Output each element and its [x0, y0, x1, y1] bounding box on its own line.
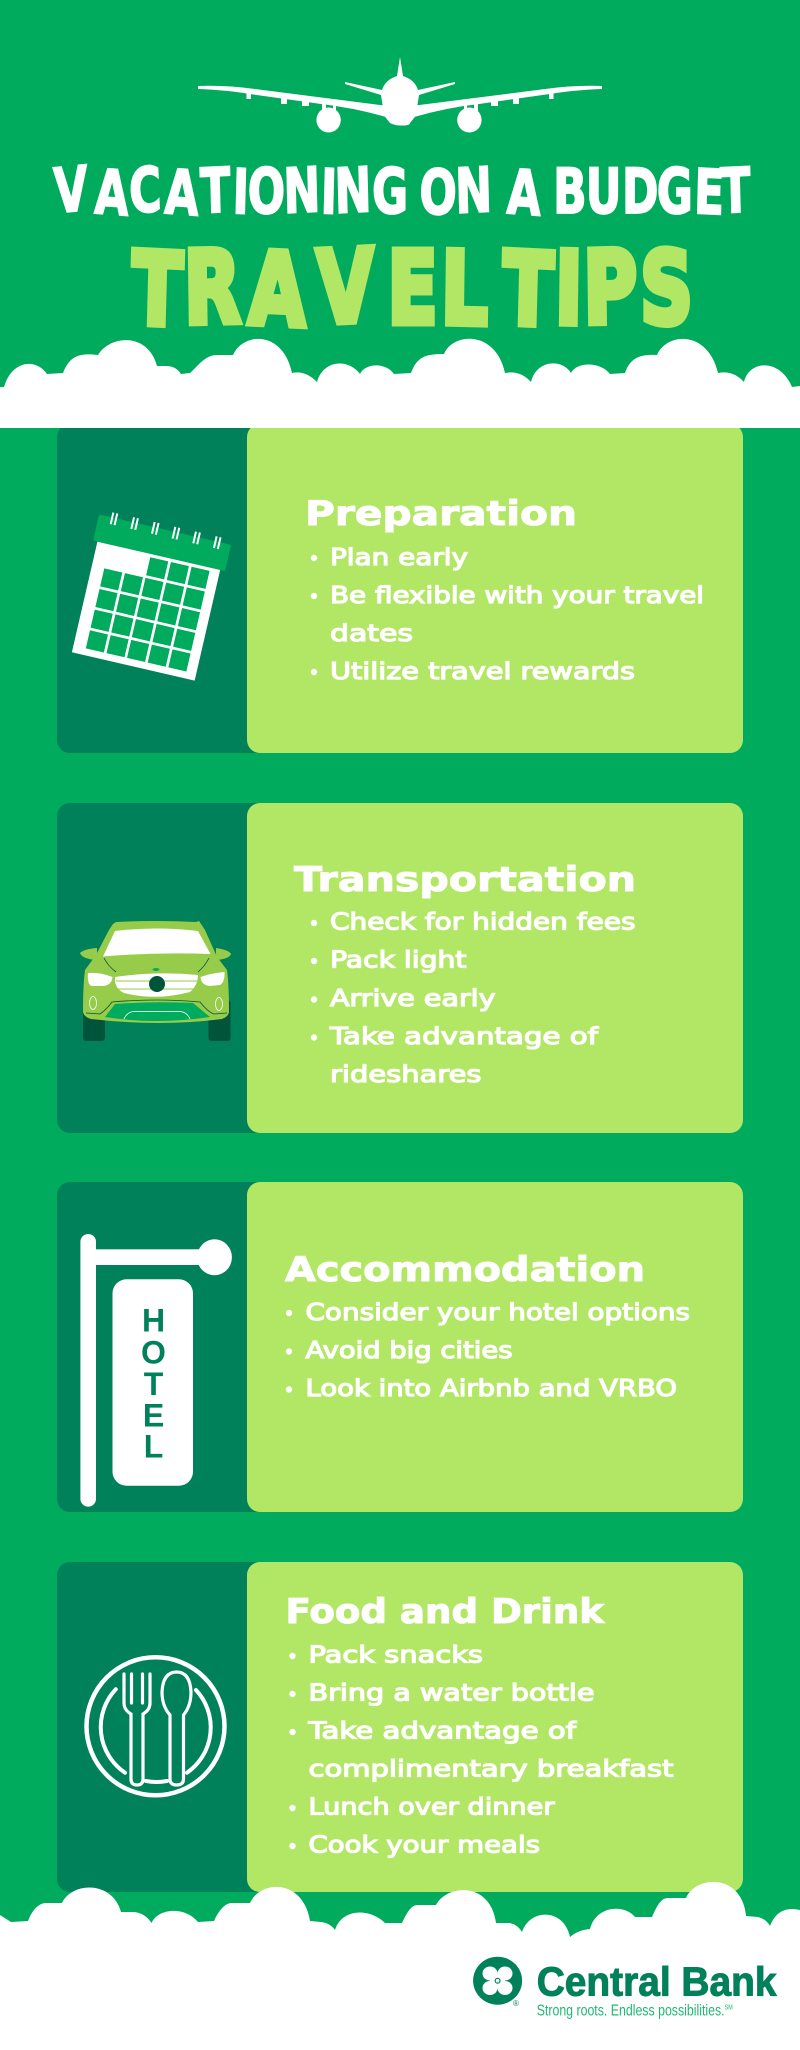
- list: accommodation tips: Look into Airbnb and VRBO: [306, 1376, 677, 1402]
- icon: hotel sign: O: [141, 1334, 166, 1370]
- panel: transportation: [57, 803, 743, 1133]
- list: transportation tips: Pack light: [330, 948, 466, 974]
- icon: calendar: [67, 510, 232, 682]
- panel: preparation: [57, 424, 743, 753]
- list: preparation tips: Plan early: [330, 545, 468, 571]
- list: accommodation tips: Consider your hotel options: [306, 1300, 690, 1326]
- list: preparation tips: Utilize travel rewards: [330, 659, 635, 685]
- list: transportation tips: Arrive early: [330, 986, 496, 1012]
- list: food and drink tips: [289, 1643, 674, 1859]
- logo tagline: Strong roots. Endless possibilities.: [537, 2003, 780, 2020]
- title: vacationing on a budget: VACATIONING ON A BUDGET: [52, 152, 752, 231]
- list: transportation tips: Take advantage of: [329, 1024, 599, 1050]
- icon: hotel sign: H: [142, 1303, 165, 1339]
- list: preparation tips: dates: [330, 621, 413, 647]
- heading: preparation: Preparation: [305, 494, 577, 534]
- title: travel tips: TRAVEL TIPS: [131, 228, 693, 350]
- list: accommodation tips: Avoid big cities: [306, 1338, 512, 1364]
- list: preparation tips: Be flexible with your travel: [330, 583, 704, 609]
- logo tagline: SM: [725, 2005, 733, 2012]
- logo wordmark: Central Bank: [537, 1959, 777, 2005]
- list: food and drink tips: complimentary breakfast: [308, 1757, 674, 1783]
- icon: plate with fork and spoon: [86, 1657, 224, 1795]
- top clouds band: [0, 339, 800, 428]
- list: food and drink tips: Lunch over dinner: [308, 1795, 555, 1821]
- icon: hotel sign: [80, 1234, 232, 1507]
- logo: Central Bank: [473, 1957, 777, 2020]
- bottom clouds band: [0, 1882, 800, 2050]
- list: preparation tips: [311, 545, 704, 685]
- icon: hotel sign: E: [143, 1398, 164, 1434]
- heading: food and drink: Food and Drink: [286, 1592, 606, 1632]
- logo mark: dogwood flower: [473, 1957, 522, 2008]
- list: transportation tips: Check for hidden fees: [330, 910, 636, 936]
- list: food and drink tips: Pack snacks: [308, 1643, 483, 1669]
- list: transportation tips: [311, 910, 636, 1088]
- logo mark: dogwood flower: ®: [513, 1999, 519, 2008]
- icon: car: [80, 921, 231, 1041]
- airplane icon: [198, 57, 602, 132]
- list: food and drink tips: Take advantage of: [307, 1719, 577, 1745]
- panel: accommodation: [57, 1182, 743, 1512]
- panel: food and drink: [57, 1562, 743, 1892]
- heading: accommodation: Accommodation: [285, 1250, 645, 1290]
- list: food and drink tips: Cook your meals: [308, 1833, 540, 1859]
- list: transportation tips: rideshares: [330, 1062, 482, 1088]
- icon: hotel sign: L: [144, 1429, 163, 1465]
- list: accommodation tips: [286, 1300, 690, 1402]
- heading: transportation: Transportation: [294, 860, 636, 900]
- list: food and drink tips: Bring a water bottle: [308, 1681, 594, 1707]
- icon: hotel sign: T: [144, 1366, 164, 1402]
